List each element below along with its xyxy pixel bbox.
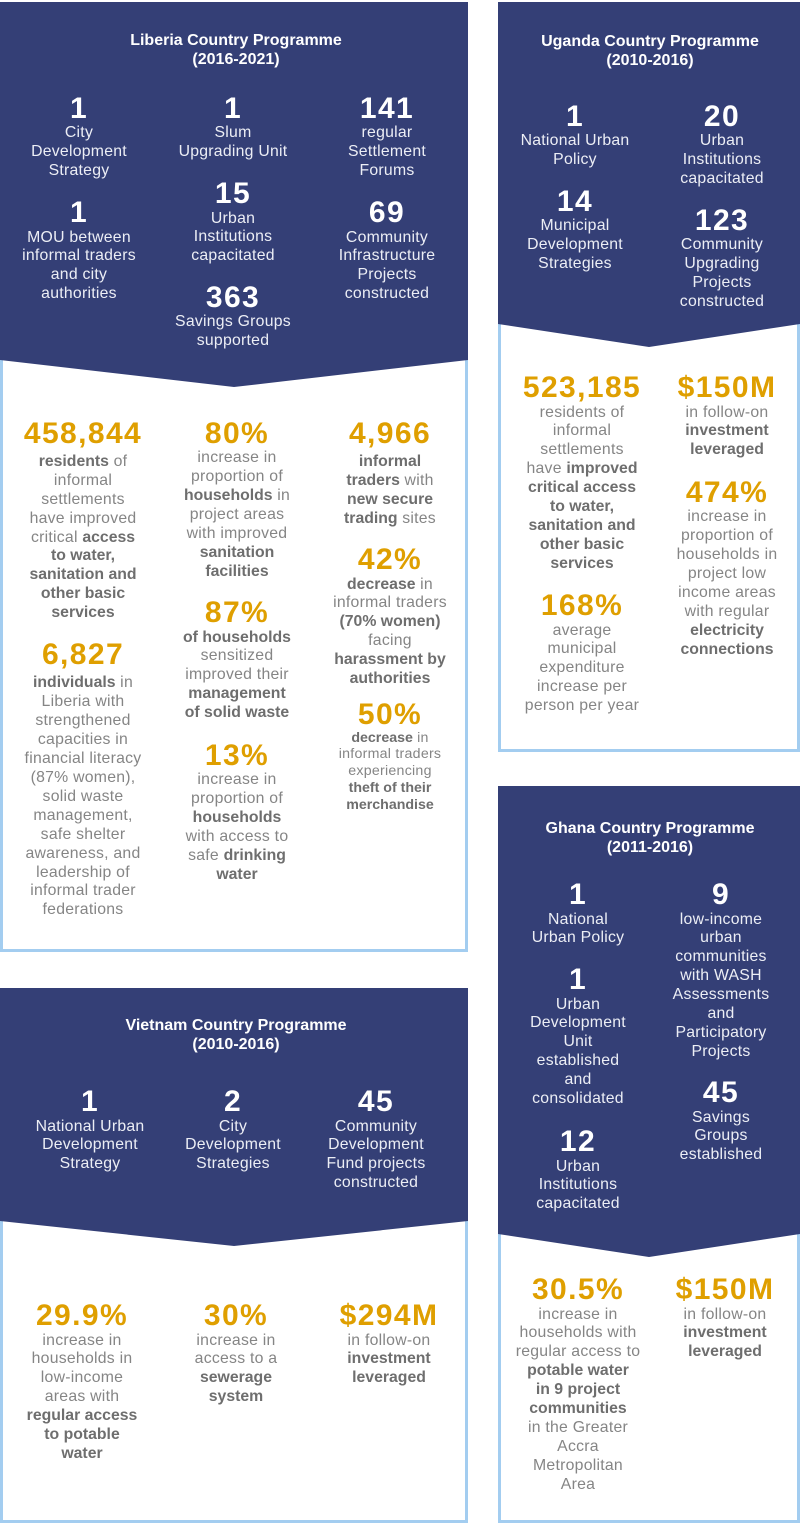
result: 80% households sanitation: [184, 417, 290, 580]
result: 42% harassment: informal traders: [333, 594, 447, 611]
result: $150M investment: investment: [685, 422, 769, 439]
stat: 9 low-income urban communities: with WASH: [680, 967, 762, 984]
stat: 45 Savings Groups: 45: [703, 1076, 739, 1109]
stat: 9 low-income urban communities: and: [707, 1005, 735, 1022]
result: $150M investment: investment: [683, 1324, 767, 1341]
result: 458,844 residents: [24, 417, 142, 621]
result: 29.9% potable water: water: [61, 1445, 103, 1462]
result: $150M investment: in follow-on: [686, 404, 768, 420]
result: $294M investment: [340, 1299, 438, 1386]
stat: 1 National Urban Policy: Urban Policy: [532, 929, 624, 946]
result: 13% drinking water: with access to: [186, 828, 288, 845]
result: 4,966 informal traders: 4,966: [349, 417, 431, 450]
stat: 1 National Urban Development Strategy: Strategy: [60, 1155, 120, 1172]
result: 29.9% potable water: regular access: [27, 1407, 137, 1424]
heading: Vietnam: (2010-2016): [192, 1036, 280, 1053]
stat: 1 MOU: informal traders: [22, 247, 136, 264]
result: 80% households sanitation: facilities: [205, 563, 269, 580]
stat: 123 Community Upgrading Projects: [680, 204, 764, 310]
result: 30.5% potable water: 30.5%: [532, 1273, 624, 1306]
stat: 141 regular Settlement Forums: Settlement: [348, 143, 426, 160]
result: 6,827 individuals: strengthened: [35, 712, 131, 729]
stat: 9 low-income urban communities: Participatory: [675, 1024, 767, 1041]
result: 87% solid waste: improved their: [185, 666, 289, 683]
result: 30.5% potable water: in the Greater: [528, 1419, 628, 1436]
result: 42% harassment: facing: [368, 632, 412, 649]
stat: 15 Urban Institutions: Institutions: [194, 228, 272, 245]
stat: 1 National Urban Policy: [532, 881, 624, 948]
stat: 69 Community Infrastructure Projects: 69: [369, 196, 405, 229]
result: 30.5% potable water: in 9 project: [536, 1381, 620, 1398]
stat: 69 Community Infrastructure Projects: constructed: [345, 285, 429, 302]
stat: 1 MOU: 1: [70, 196, 88, 229]
stat: 1 Slum Upgrading Unit: 1: [224, 92, 242, 125]
result: 87% solid waste: sensitized: [201, 647, 273, 664]
result: 29.9% potable water: increase in: [42, 1332, 122, 1348]
stat: 1 MOU: authorities: [41, 285, 117, 302]
result: $294M investment: investment: [347, 1350, 431, 1367]
stat: 363 Savings Groups: [175, 281, 291, 349]
result: 523,185 residents: sanitation and: [528, 517, 636, 534]
result: 50% theft: merchandise: [346, 797, 434, 813]
stat: 363 Savings Groups: supported: [197, 332, 269, 349]
result: 80% households sanitation: sanitation: [200, 544, 274, 561]
result: 168% expenditure: municipal: [548, 640, 616, 657]
stat: 1 City Development Strategy: City: [65, 124, 93, 141]
stat: 12 Urban Institutions: Urban: [556, 1158, 600, 1174]
panel: Vietnam Country Programme: [0, 988, 468, 1523]
result: 50% theft: theft of their: [349, 780, 431, 796]
stat: 1 Urban Development Unit: Urban: [556, 996, 600, 1012]
heading: Ghana: [546, 820, 754, 858]
result: 4,966 informal traders: new secure: [347, 491, 433, 508]
result: 523,185 residents: informal: [553, 422, 611, 439]
result: 523,185 residents: 523,185: [523, 371, 641, 404]
stat: 1 Urban Development Unit: and: [564, 1071, 592, 1088]
stat: 1 MOU: and city: [51, 266, 107, 283]
result: 80% households sanitation: increase in: [197, 449, 277, 466]
stat: 9 low-income urban communities: low-income: [680, 910, 762, 928]
result: 6,827 individuals: Liberia with: [42, 693, 124, 710]
result: $150M investment: leveraged: [688, 1343, 762, 1360]
result: 474% electricity: connections: [680, 641, 774, 658]
stat: 14 Municipal Development Strategies: Strategies: [538, 255, 612, 272]
result: 30% sewerage: 30%: [204, 1299, 268, 1332]
result: 168% expenditure: average: [553, 622, 611, 638]
result: 6,827 individuals: solid waste: [43, 788, 123, 805]
stat: 141 regular Settlement Forums: Forums: [359, 162, 415, 179]
result: 474% electricity: [677, 476, 777, 658]
stat: 45 Community Development Fund projects: [327, 1085, 425, 1191]
stat: 1 National Urban Development Strategy: 1: [81, 1085, 99, 1118]
stat: 1 Urban Development Unit: Development: [530, 1014, 626, 1031]
header shape: Ghana: [498, 786, 800, 1257]
result: 30.5% potable water: Metropolitan: [533, 1457, 623, 1474]
result: 458,844 residents: to water,: [51, 547, 115, 564]
result: 523,185 residents: have improved: [526, 460, 638, 477]
stat: 15 Urban Institutions: Urban: [211, 210, 255, 226]
result: 30.5% potable water: increase in: [538, 1306, 618, 1322]
stat: 45 Savings Groups: Groups: [694, 1127, 748, 1144]
result: 168% expenditure: [525, 589, 639, 714]
stat: 363 Savings Groups: Savings Groups: [175, 313, 291, 330]
result: $294M investment: in follow-on: [348, 1332, 430, 1348]
result: $294M investment: leveraged: [352, 1369, 426, 1386]
stat: 123 Community Upgrading Projects: Community: [681, 236, 763, 253]
result: 13% drinking water: water: [216, 866, 258, 883]
stat: 1 MOU: [22, 196, 136, 302]
result: 458,844 residents: residents of: [39, 453, 127, 470]
header shape: Uganda: [498, 2, 800, 347]
stat: 1 National Urban Policy: [521, 100, 629, 168]
stat: 69 Community Infrastructure Projects: Community: [346, 228, 428, 246]
result: 474% electricity: project low: [688, 565, 766, 582]
stat: 141 regular Settlement Forums: 141: [360, 92, 414, 125]
heading: Liberia: Liberia Country Programme: [130, 32, 342, 49]
result: 458,844 residents: informal: [54, 472, 112, 489]
stat: 20 Urban Institutions: capacitated: [680, 170, 764, 187]
result: 30.5% potable water: households with: [519, 1324, 637, 1341]
result: 30.5% potable water: regular access to: [516, 1343, 640, 1360]
stat: 123 Community Upgrading Projects: Projects: [692, 274, 752, 291]
stat: 45 Community Development Fund projects: constructed: [334, 1174, 418, 1191]
result: 523,185 residents: critical access: [528, 479, 636, 496]
stat: 1 Slum Upgrading Unit: [179, 92, 288, 160]
result: 474% electricity: income areas: [678, 584, 776, 601]
stat: 69 Community Infrastructure Projects: [339, 196, 435, 302]
stat: 45 Community Development Fund projects: Fund projects: [327, 1155, 425, 1172]
stat: 14 Municipal Development Strategies: [527, 185, 623, 272]
result: 458,844 residents: other basic: [41, 585, 125, 602]
result: 6,827 individuals: federations: [43, 901, 123, 918]
result: 458,844 residents: 458,844: [24, 417, 142, 450]
heading: Uganda: (2010-2016): [606, 52, 694, 69]
stat: 1 National Urban Policy: 1: [566, 100, 584, 133]
result: 30.5% potable water: communities: [529, 1400, 627, 1417]
stat: 2 City Development Strategies: Development: [185, 1136, 281, 1153]
result: 523,185 residents: residents of: [540, 404, 624, 420]
heading: Liberia: [130, 32, 342, 68]
result: 6,827 individuals: management,: [33, 807, 133, 824]
heading: Liberia: (2016-2021): [192, 51, 280, 68]
stat: 12 Urban Institutions: [536, 1128, 620, 1214]
stat: 20 Urban Institutions: Urban: [700, 132, 744, 149]
stat: 363 Savings Groups: 363: [206, 281, 260, 314]
result: 87% solid waste: 87%: [205, 596, 269, 629]
heading: Ghana: Ghana Country Programme: [546, 820, 754, 837]
result: 80% households sanitation: with improved: [187, 525, 287, 542]
result: 87% solid waste: [183, 596, 291, 721]
stat: 1 Slum Upgrading Unit: Slum: [214, 124, 252, 141]
result: 474% electricity: proportion of: [681, 527, 773, 544]
stat: 12 Urban Institutions: 12: [560, 1125, 596, 1158]
stat: 9 low-income urban communities: Projects: [691, 1043, 751, 1060]
stat: 2 City Development Strategies: 2: [224, 1085, 242, 1118]
result: $150M investment: [678, 371, 776, 458]
result: 87% solid waste: management: [188, 685, 286, 702]
result: 523,185 residents: services: [550, 555, 614, 572]
stat: 123 Community Upgrading Projects: constructed: [680, 293, 764, 310]
stat: 15 Urban Institutions: capacitated: [191, 247, 275, 264]
result: 29.9% potable water: to potable: [44, 1426, 120, 1443]
stat: 1 Urban Development Unit: 1: [569, 963, 587, 996]
header shape: Liberia: [0, 2, 468, 387]
stat: 14 Municipal Development Strategies: Development: [527, 236, 623, 253]
result: $294M investment: $294M: [340, 1299, 438, 1332]
stat: 2 City Development Strategies: [185, 1085, 281, 1172]
result: $150M investment: leveraged: [690, 441, 764, 458]
stat: 45 Savings Groups: established: [680, 1146, 762, 1163]
stat: 141 regular Settlement Forums: [348, 92, 426, 179]
result: 6,827 individuals: safe shelter: [41, 826, 125, 843]
result: 458,844 residents: sanitation and: [29, 566, 137, 583]
result: 4,966 informal traders: trading sites: [344, 510, 436, 527]
result: 50% theft: experiencing: [348, 763, 432, 779]
result: 168% expenditure: 168%: [541, 589, 623, 622]
result: $150M investment: [676, 1276, 774, 1362]
result: 13% drinking water: increase in: [197, 771, 277, 788]
stat: 14 Municipal Development Strategies: 14: [557, 185, 593, 218]
stat: 9 low-income urban communities: [673, 881, 769, 1062]
stat: 15 Urban Institutions: 15: [215, 177, 251, 210]
result: 168% expenditure: person per year: [525, 697, 639, 714]
stat: 9 low-income urban communities: Assessments: [673, 986, 769, 1003]
result: 458,844 residents: critical access: [31, 528, 135, 546]
stat: 45 Savings Groups: Savings: [692, 1108, 750, 1126]
stat: 45 Community Development Fund projects: Development: [328, 1136, 424, 1153]
stat: 9 low-income urban communities: communities: [675, 948, 767, 965]
stat: 9 low-income urban communities: urban: [700, 929, 742, 946]
result: 30.5% potable water: [516, 1276, 640, 1495]
stat: 20 Urban Institutions: [680, 100, 764, 187]
stat: 141 regular Settlement Forums: regular: [362, 124, 412, 141]
result: 474% electricity: 474%: [686, 476, 768, 509]
result: 6,827 individuals: financial literacy: [25, 750, 141, 767]
stat: 69 Community Infrastructure Projects: Infrastructure: [339, 247, 435, 264]
result: 523,185 residents: [523, 371, 641, 572]
stat: 1 City Development Strategy: Strategy: [49, 162, 109, 179]
result: 474% electricity: increase in: [687, 508, 767, 525]
stat: 1 National Urban Policy: Policy: [553, 151, 597, 168]
result: 4,966 informal traders: traders with: [346, 472, 434, 489]
stat: 1 Urban Development Unit: Unit: [563, 1033, 593, 1050]
stat: 45 Community Development Fund projects: 45: [358, 1085, 394, 1118]
heading: Ghana: (2011-2016): [607, 839, 693, 856]
result: 474% electricity: households in: [677, 546, 777, 563]
result: 6,827 individuals: individuals in: [33, 674, 133, 691]
result: 50% theft: [339, 698, 441, 813]
stat: 12 Urban Institutions: Institutions: [539, 1176, 617, 1193]
stat: 1 Urban Development Unit: consolidated: [532, 1090, 624, 1107]
result: 30% sewerage: sewerage: [200, 1369, 272, 1386]
panel: Uganda Country Programme: [498, 2, 800, 752]
stat: 1 Urban Development Unit: established: [537, 1052, 619, 1069]
result: 6,827 individuals: 6,827: [42, 638, 124, 671]
result: 6,827 individuals: (87% women),: [31, 769, 135, 786]
result: 30% sewerage: increase in: [196, 1332, 276, 1348]
stat: 123 Community Upgrading Projects: 123: [695, 204, 749, 237]
result: 523,185 residents: settlements: [540, 441, 624, 458]
result: 50% theft: informal traders: [339, 746, 441, 762]
result: 29.9% potable water: households in: [32, 1350, 132, 1367]
result: 80% households sanitation: proportion of: [191, 468, 283, 485]
result: 458,844 residents: have improved: [30, 510, 136, 527]
heading: Uganda: [541, 33, 759, 69]
result: 6,827 individuals: informal trader: [30, 882, 136, 899]
result: 42% harassment: decrease in: [347, 576, 433, 592]
result: 6,827 individuals: leadership of: [36, 864, 130, 881]
result: 29.9% potable water: areas with: [45, 1388, 119, 1405]
result: 29.9% potable water: low-income: [41, 1369, 123, 1386]
stat: 1 National Urban Policy: National: [548, 910, 608, 928]
stat: 1 National Urban Development Strategy: Development: [42, 1136, 138, 1153]
header shape: Vietnam: [0, 988, 468, 1246]
result: 29.9% potable water: [27, 1299, 137, 1462]
stat: 1 National Urban Policy: 1: [569, 878, 587, 911]
result: 474% electricity: electricity: [690, 622, 764, 639]
result: 30% sewerage: [195, 1299, 278, 1405]
stat: 2 City Development Strategies: Strategies: [196, 1155, 270, 1172]
result: 42% harassment: harassment by: [334, 651, 446, 668]
result: 80% households sanitation: 80%: [205, 417, 269, 450]
result: 30.5% potable water: Accra: [557, 1438, 599, 1455]
result: 42% harassment: [333, 543, 447, 687]
stat: 1 National Urban Development Strategy: [36, 1085, 144, 1172]
result: 13% drinking water: 13%: [205, 739, 269, 772]
result: 458,844 residents: settlements: [41, 491, 125, 508]
result: 523,185 residents: to water,: [550, 498, 614, 515]
result: $150M investment: in follow-on: [684, 1306, 766, 1322]
result: 13% drinking water: [186, 739, 288, 883]
stat: 1 City Development Strategy: 1: [70, 92, 88, 125]
result: $150M investment: $150M: [678, 371, 776, 404]
result: 80% households sanitation: households in: [184, 487, 290, 504]
stat: 20 Urban Institutions: 20: [704, 100, 740, 133]
result: 29.9% potable water: 29.9%: [36, 1299, 128, 1332]
result: 168% expenditure: increase per: [537, 678, 627, 695]
panel: Ghana Country Programme: [498, 786, 800, 1523]
result: $150M investment: $150M: [676, 1273, 774, 1306]
result: 523,185 residents: other basic: [540, 536, 624, 553]
stat: 1 Slum Upgrading Unit: Upgrading Unit: [179, 143, 287, 160]
result: 13% drinking water: proportion of: [191, 790, 283, 807]
heading: Uganda: Uganda Country Programme: [541, 33, 759, 50]
stat: 1 Urban Development Unit: [530, 966, 626, 1109]
stat: 12 Urban Institutions: capacitated: [536, 1195, 620, 1212]
stat: 14 Municipal Development Strategies: Municipal: [541, 217, 609, 234]
result: 458,844 residents: services: [51, 604, 115, 621]
stat: 2 City Development Strategies: City: [219, 1118, 247, 1134]
result: 168% expenditure: expenditure: [539, 659, 625, 676]
result: 474% electricity: with regular: [685, 603, 769, 620]
result: 30.5% potable water: Area: [561, 1476, 595, 1493]
result: 6,827 individuals: awareness, and: [25, 845, 141, 862]
stat: 1 MOU: MOU between: [27, 228, 131, 246]
result: 30% sewerage: system: [209, 1388, 263, 1405]
result: 42% harassment: (70% women): [340, 613, 440, 630]
stat: 45 Community Development Fund projects: Community: [335, 1118, 417, 1134]
result: 13% drinking water: households: [193, 809, 281, 826]
result: 42% harassment: authorities: [350, 670, 430, 687]
stat: 123 Community Upgrading Projects: Upgrading: [684, 255, 760, 272]
result: 4,966 informal traders: informal: [359, 453, 421, 470]
stat: 20 Urban Institutions: Institutions: [683, 151, 761, 168]
stat: 1 National Urban Policy: National Urban: [521, 132, 629, 149]
result: 50% theft: decrease in: [351, 730, 429, 746]
result: 30.5% potable water: potable water: [527, 1362, 629, 1379]
stat: 1 City Development Strategy: [31, 92, 127, 179]
stat: 45 Savings Groups: [680, 1079, 762, 1165]
result: 80% households sanitation: project areas: [190, 506, 284, 523]
heading: Vietnam: Vietnam Country Programme: [125, 1017, 347, 1034]
stat: 1 National Urban Development Strategy: National Urban: [36, 1118, 144, 1134]
heading: Vietnam: [125, 1017, 347, 1053]
result: 4,966 informal traders: [344, 417, 436, 527]
result: 6,827 individuals: [24, 638, 142, 918]
result: 6,827 individuals: capacities in: [38, 731, 128, 748]
result: 50% theft: 50%: [358, 698, 422, 731]
panel: Liberia Country Programme: [0, 2, 468, 952]
result: 87% solid waste: of households: [183, 628, 291, 646]
result: 30% sewerage: access to a: [195, 1350, 277, 1367]
stat: 1 City Development Strategy: Development: [31, 143, 127, 160]
stat: 69 Community Infrastructure Projects: Projects: [357, 266, 417, 283]
result: 87% solid waste: of solid waste: [185, 704, 289, 721]
result: 13% drinking water: safe drinking: [188, 847, 286, 864]
stat: 15 Urban Institutions: [191, 177, 275, 264]
stat: 9 low-income urban communities: 9: [712, 878, 730, 911]
result: 42% harassment: 42%: [358, 543, 422, 576]
